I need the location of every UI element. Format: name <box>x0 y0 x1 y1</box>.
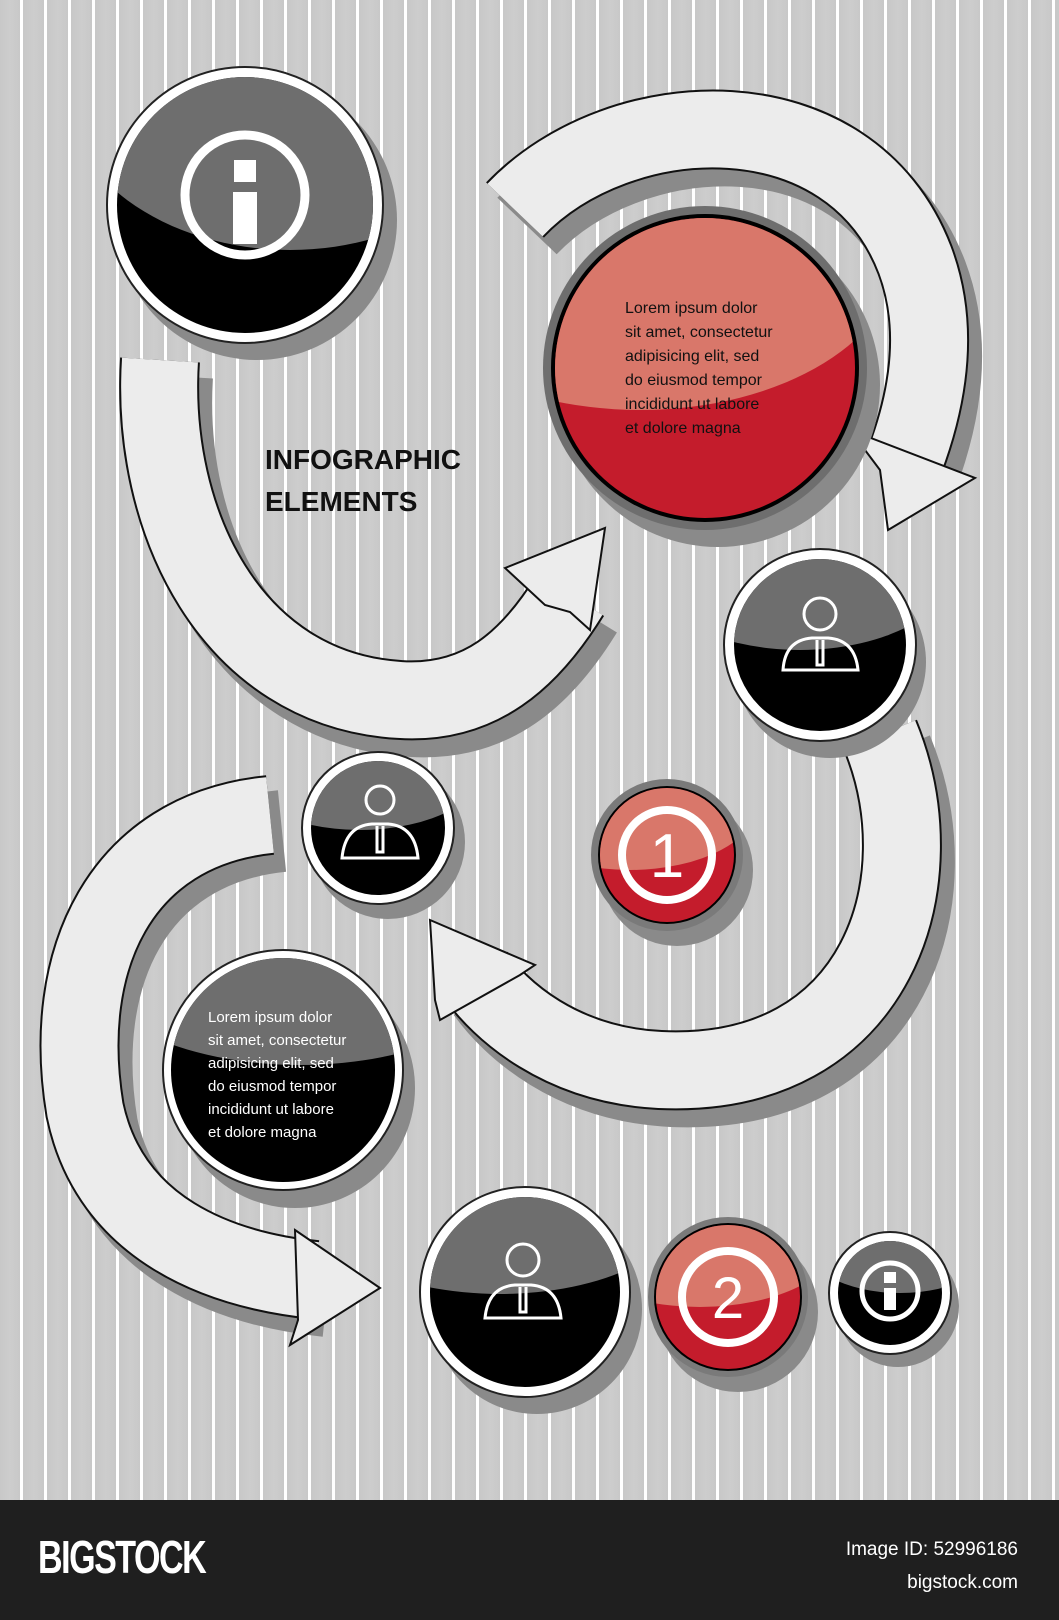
arrow: left big curved arrow <box>80 815 380 1345</box>
icon: person <box>342 786 418 858</box>
text: dark circle body: do eiusmod tempor <box>208 1078 336 1095</box>
text: red circle body: incididunt ut labore <box>625 396 759 413</box>
text: red circle body: sit amet, consectetur <box>625 324 773 341</box>
main graphic <box>39 66 982 1414</box>
arrow: top-left curved arrow <box>159 360 605 716</box>
circle: middle person <box>301 751 465 919</box>
text: red circle body: adipisicing elit, sed <box>625 348 759 365</box>
footer logo: BIGSTOCK <box>38 1531 205 1583</box>
circle: number 2: 2 <box>712 1266 744 1331</box>
footer image id <box>846 1539 1018 1593</box>
footer image id: Image ID: 52996186 <box>846 1539 1018 1560</box>
icon: person <box>485 1244 561 1318</box>
circle: right person <box>723 548 926 758</box>
text: red circle body: et dolore magna <box>625 420 741 437</box>
icon: person <box>783 598 858 670</box>
circle: red text <box>543 206 880 547</box>
text: dark circle body: et dolore magna <box>208 1124 317 1141</box>
text: red circle body: do eiusmod tempor <box>625 372 763 389</box>
circle: number 2 <box>648 1217 818 1392</box>
title: INFOGRAPHIC <box>265 444 461 475</box>
arrow: top-right curved arrow <box>515 129 975 530</box>
circle: top-left info <box>106 66 397 360</box>
icon: info <box>862 1263 918 1319</box>
arrow: right lower curved arrow <box>430 735 914 1086</box>
text: dark circle body: sit amet, consectetur <box>208 1032 346 1049</box>
circle: bottom person <box>419 1186 642 1414</box>
circle: number 1: 1 <box>650 822 684 891</box>
footer image id: bigstock.com <box>907 1572 1018 1593</box>
text: dark circle body: adipisicing elit, sed <box>208 1055 334 1072</box>
text: red circle body: Lorem ipsum dolor <box>625 300 758 317</box>
text: dark circle body: Lorem ipsum dolor <box>208 1009 332 1026</box>
title: ELEMENTS <box>265 486 417 517</box>
circle: number 1 <box>591 779 753 946</box>
icon: info <box>185 135 305 255</box>
footer bar <box>0 1500 1059 1620</box>
circle: small info <box>828 1231 959 1367</box>
text: dark circle body: incididunt ut labore <box>208 1101 334 1118</box>
circle: dark text <box>162 949 415 1208</box>
